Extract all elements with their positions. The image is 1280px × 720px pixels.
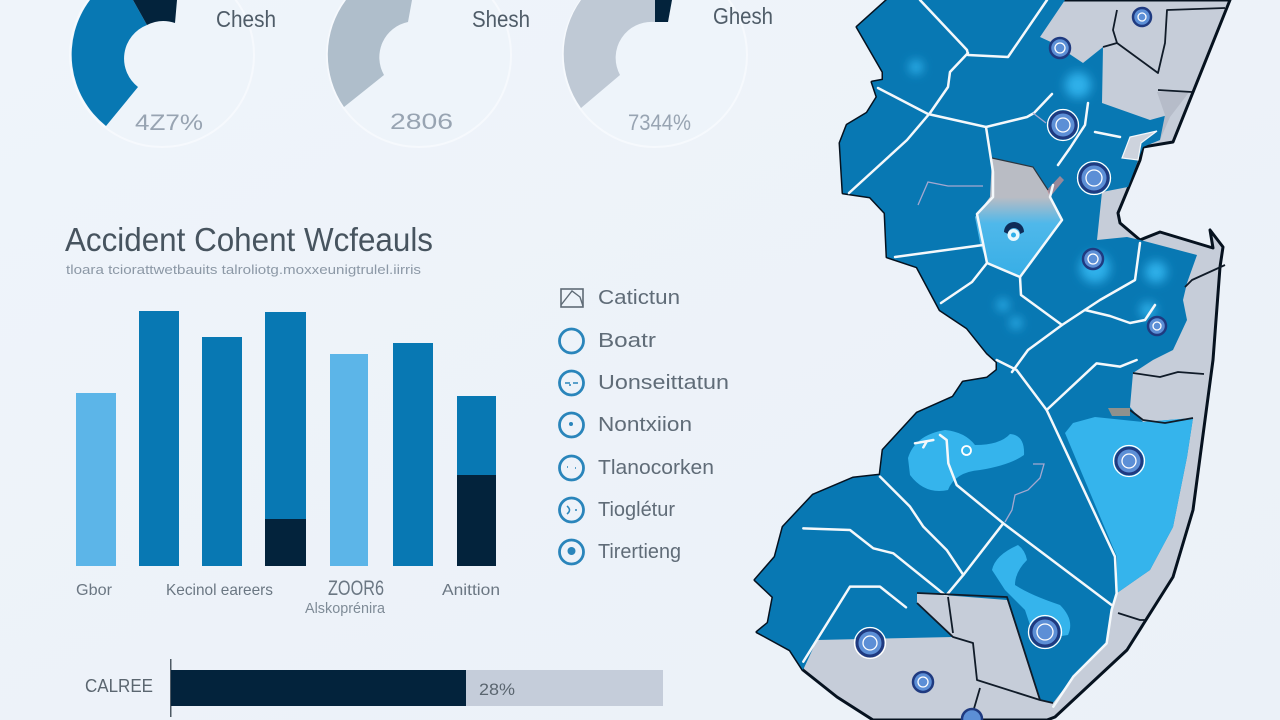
heading: tloara tciorattwetbauits talroliotg.moxxeunigtrulel.iirris — [66, 262, 422, 277]
county borders — [849, 0, 1155, 372]
pin — [913, 672, 933, 692]
donut chart 2 — [327, 0, 530, 147]
bar chart: Anittion — [442, 582, 500, 599]
pin — [1031, 618, 1059, 646]
legend item: Tioglétur — [560, 498, 675, 522]
county map — [755, 0, 1230, 720]
pin outlines — [854, 13, 1161, 687]
pin — [962, 709, 982, 720]
stacked progress bar: 28% — [479, 680, 515, 699]
donut chart 2: Shesh — [472, 6, 530, 32]
legend item: Tioglétur: Tioglétur — [598, 499, 675, 521]
gray peninsula and darker patch — [1122, 91, 1190, 160]
bar chart: Gbor — [76, 582, 113, 599]
pin — [1133, 8, 1151, 26]
donut chart 1: 4Z7% — [135, 110, 203, 135]
legend item: Boatr: Boatr — [598, 330, 656, 352]
map base land — [755, 0, 1230, 720]
legend — [560, 287, 729, 564]
pin — [857, 630, 883, 656]
donut chart 1: Chesh — [216, 6, 276, 32]
bar chart: ZOOR6 — [328, 577, 384, 600]
stacked progress bar: CALREE — [85, 676, 153, 696]
legend item: Tlanocorken — [560, 456, 714, 480]
central pin — [1004, 222, 1024, 241]
legend item: Uonseittatun — [560, 371, 729, 395]
blue counties — [755, 0, 1197, 703]
legend item: Tirertieng — [560, 540, 681, 564]
pin — [1083, 249, 1103, 269]
legend item: Nontxiion: Nontxiion — [598, 414, 692, 436]
legend item: Boatr — [560, 329, 656, 353]
legend item: Nontxiion — [560, 413, 692, 437]
legend item: Uonseittatun: Uonseittatun — [598, 372, 729, 394]
legend item: Catictun — [561, 287, 680, 309]
pin — [1050, 38, 1070, 58]
gray-area borders — [917, 8, 1225, 712]
rivers — [918, 113, 1046, 522]
donut chart 1 — [70, 0, 276, 147]
bar chart: Kecinol eareers — [166, 582, 273, 599]
central county — [975, 158, 1062, 277]
donut chart 3 — [563, 0, 773, 147]
stacked progress bar — [85, 659, 663, 717]
pin — [1148, 317, 1166, 335]
light patches — [908, 417, 1193, 640]
small ring marker — [962, 446, 971, 455]
blue patches — [909, 60, 1167, 329]
heading — [65, 221, 433, 277]
bar chart: Alskoprénira — [305, 600, 386, 617]
donut chart 3: Ghesh — [713, 3, 773, 29]
bar chart — [76, 311, 500, 617]
legend item: Tirertieng: Tirertieng — [598, 541, 681, 563]
dark gray patch — [1108, 408, 1130, 416]
donut chart 3: 7344% — [628, 110, 691, 135]
legend item: Tlanocorken: Tlanocorken — [598, 457, 714, 479]
heading: Accident Cohent Wcfeauls — [65, 221, 433, 258]
map pins — [857, 8, 1166, 720]
donut chart 2: 2806 — [390, 109, 453, 134]
pin — [1050, 112, 1076, 138]
pin — [1116, 448, 1142, 474]
pin — [1080, 164, 1108, 192]
legend item: Catictun: Catictun — [598, 287, 680, 309]
